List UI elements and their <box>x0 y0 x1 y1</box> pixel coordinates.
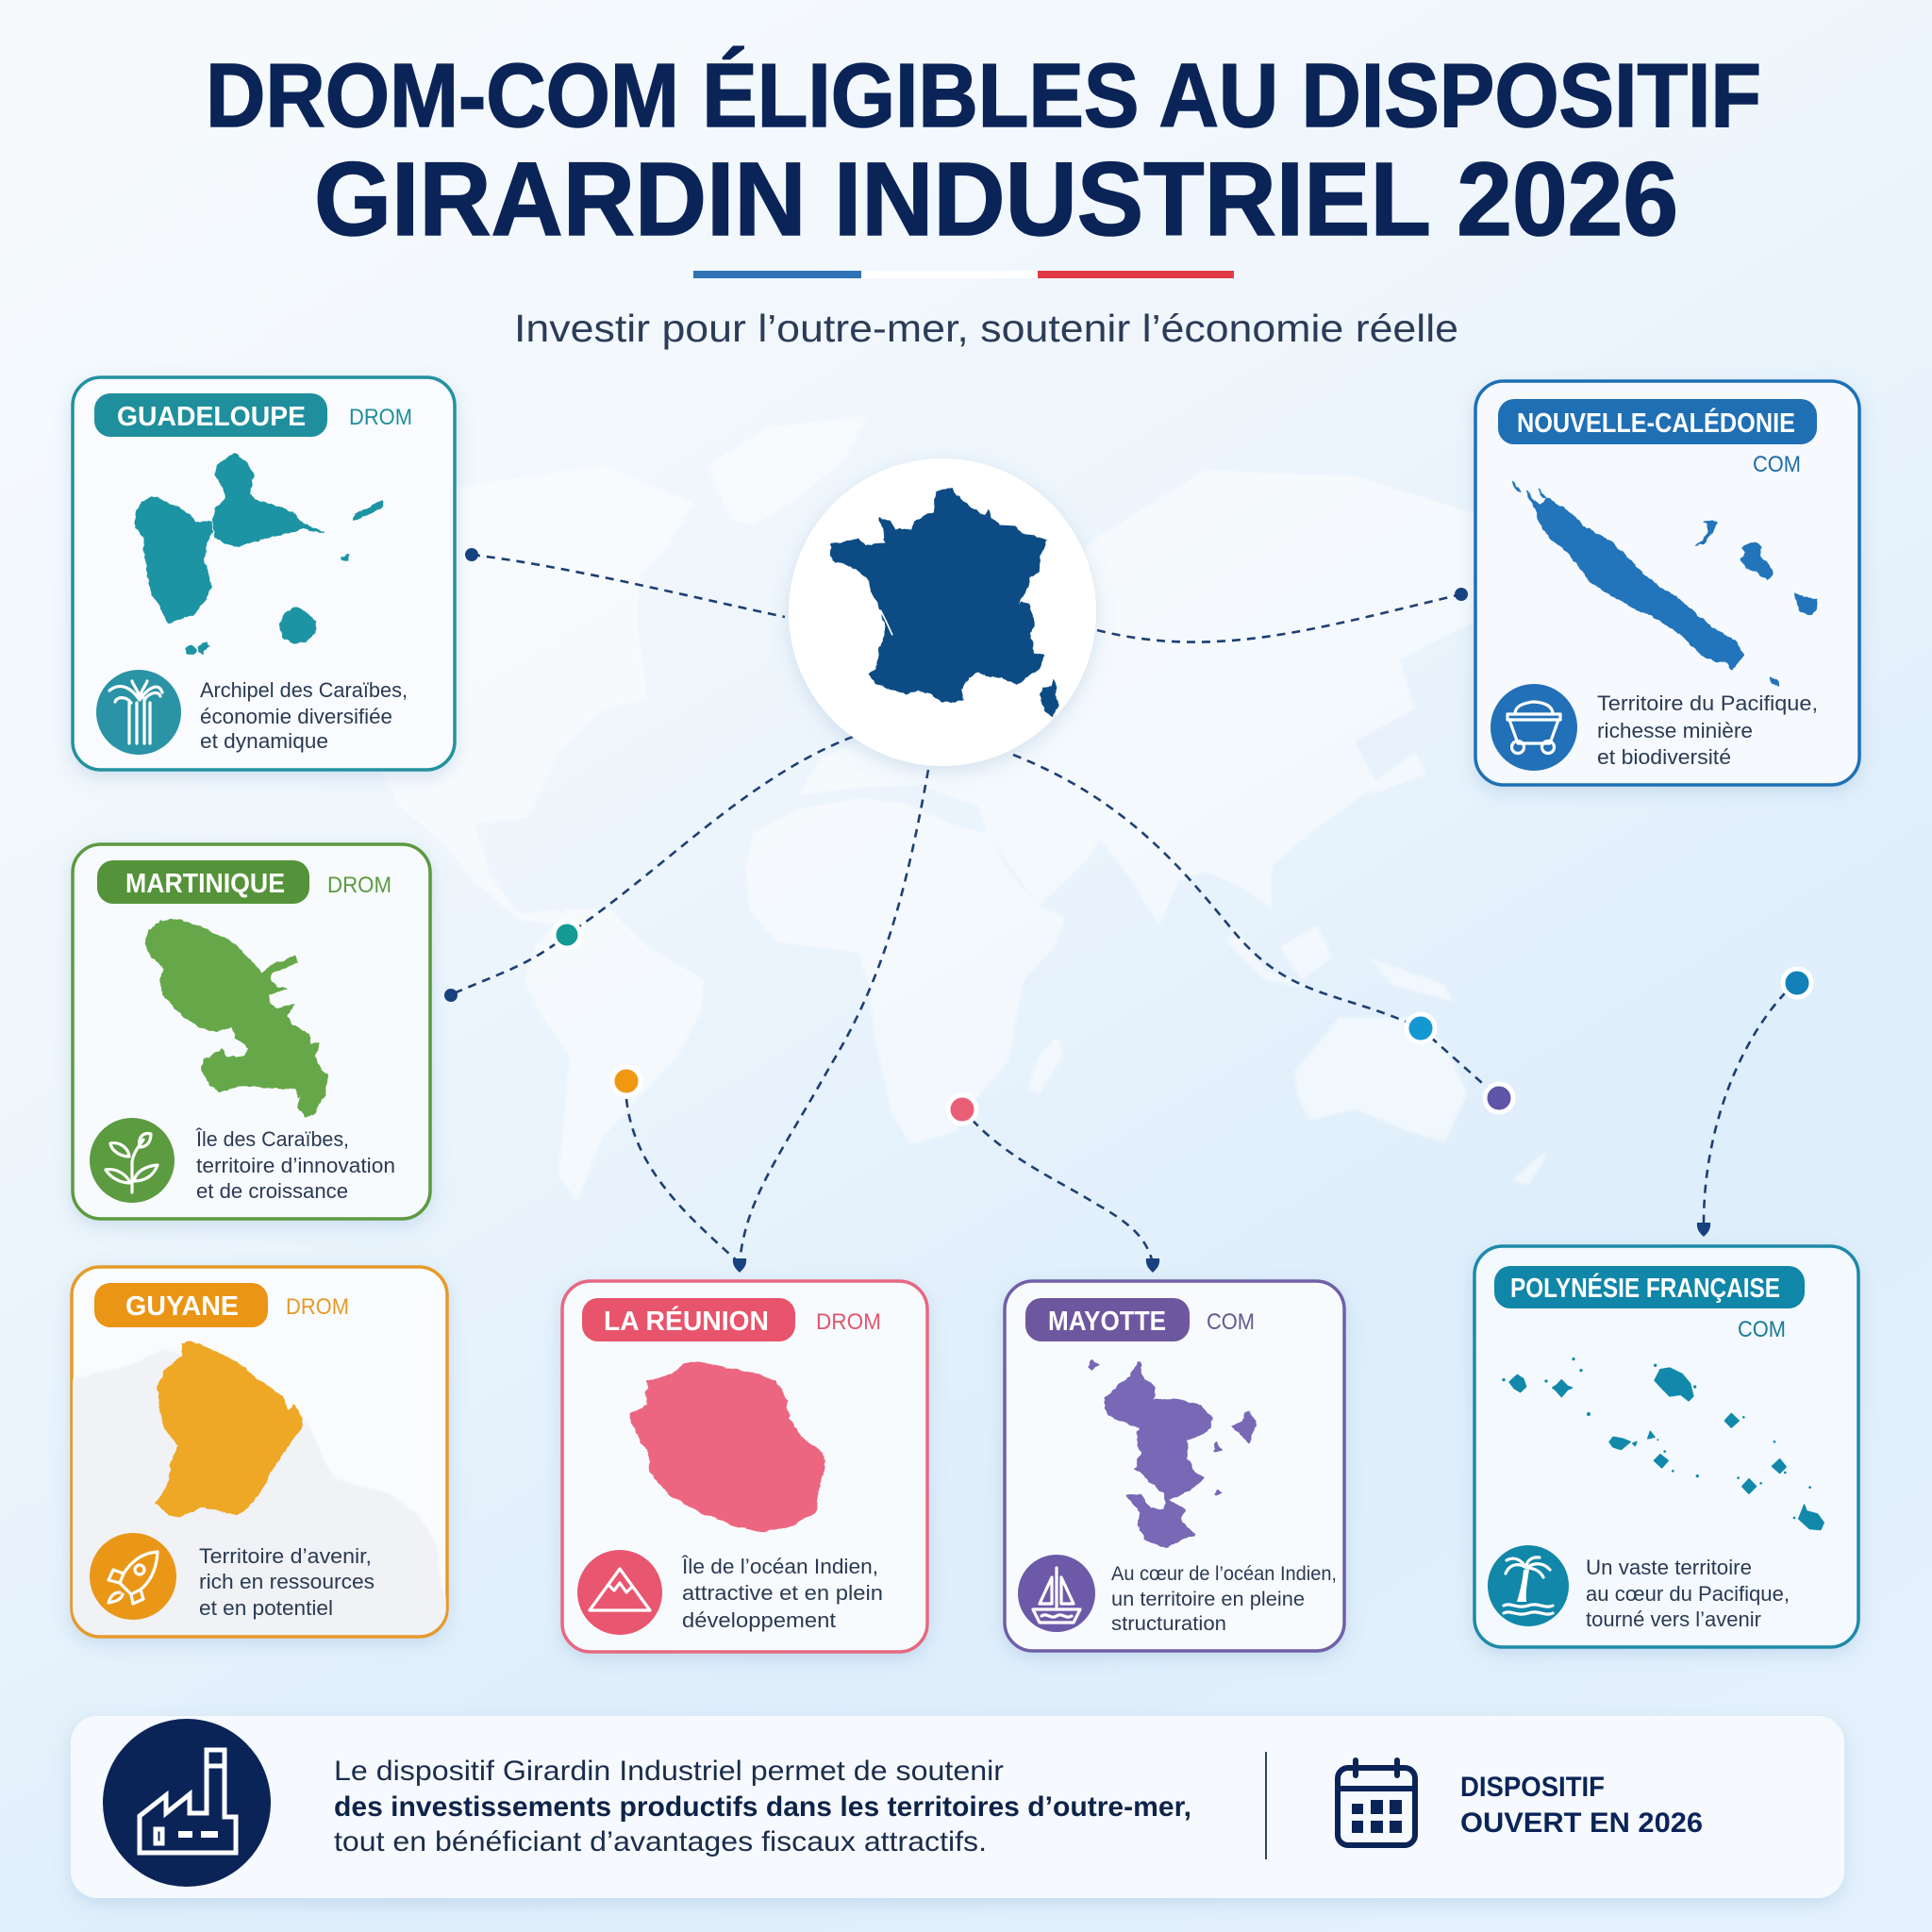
description: économie diversifiée <box>200 705 392 728</box>
opening note <box>1460 1772 1703 1839</box>
icon: factory <box>103 1719 271 1887</box>
map: Nouvelle-Calédonie <box>1512 482 1817 686</box>
panel: Guadeloupe <box>73 377 455 770</box>
description: structuration <box>1111 1613 1226 1635</box>
tricolour rule <box>693 271 1234 278</box>
label pill: Martinique: MARTINIQUE <box>125 869 285 899</box>
opening note: DISPOSITIF <box>1460 1772 1605 1803</box>
description: territoire d’innovation <box>196 1154 395 1177</box>
description: et dynamique <box>200 729 328 753</box>
title: GIRARDIN INDUSTRIEL 2026 <box>314 142 1678 258</box>
label pill: La Réunion: LA RÉUNION <box>604 1305 769 1337</box>
panel: Nouvelle-Calédonie <box>1475 381 1859 785</box>
description <box>1586 1556 1790 1631</box>
label pill: Nouvelle-Calédonie <box>1498 399 1817 444</box>
title <box>206 45 1761 258</box>
France centre circle <box>789 458 1096 766</box>
description <box>681 1555 883 1632</box>
map: Polynésie française <box>1502 1357 1824 1530</box>
connector end dots <box>444 548 1710 1273</box>
divider <box>1265 1752 1267 1859</box>
map: La Réunion <box>633 1362 824 1531</box>
map: Martinique <box>145 920 327 1116</box>
opening note: OUVERT EN 2026 <box>1460 1807 1703 1839</box>
icon: sailboat <box>1018 1555 1095 1632</box>
title: DROM-COM ÉLIGIBLES AU DISPOSITIF <box>206 45 1761 146</box>
icon: calendar <box>1338 1760 1415 1845</box>
banner text <box>334 1756 1191 1857</box>
panel: Polynésie française <box>1474 1246 1858 1647</box>
description: Un vaste territoire <box>1586 1556 1752 1579</box>
description: Archipel des Caraïbes, <box>200 678 408 702</box>
description: un territoire en pleine <box>1111 1589 1305 1610</box>
description <box>1111 1563 1337 1635</box>
description: et de croissance <box>196 1179 348 1203</box>
icon: plant <box>90 1118 175 1203</box>
label pill: La Réunion <box>582 1298 795 1341</box>
description: Territoire du Pacifique, <box>1597 691 1818 715</box>
map: Guyane <box>156 1341 303 1517</box>
status: DROM: DROM <box>286 1294 349 1320</box>
status: COM: COM <box>1207 1309 1255 1335</box>
panel: Guyane <box>69 1267 447 1637</box>
description: au cœur du Pacifique, <box>1586 1582 1790 1606</box>
description: richesse minière <box>1597 719 1753 742</box>
description <box>200 678 408 753</box>
map: Mayotte <box>1090 1361 1256 1547</box>
banner text: tout en bénéficiant d’avantages fiscaux attractifs. <box>334 1826 987 1857</box>
panel: La Réunion <box>562 1281 927 1652</box>
status: COM: COM <box>1738 1317 1786 1342</box>
map: Guadeloupe <box>136 454 382 654</box>
description <box>195 1127 395 1203</box>
panel: Martinique <box>73 844 430 1219</box>
status: DROM: DROM <box>816 1309 881 1335</box>
description: développement <box>682 1608 837 1632</box>
label pill: Mayotte: MAYOTTE <box>1048 1307 1166 1337</box>
map: metropolitan France <box>830 488 1058 716</box>
neighbouring land shading <box>69 1349 446 1637</box>
icon: sugar cane <box>96 670 181 755</box>
subtitle: Investir pour l’outre-mer, soutenir l’économie réelle <box>514 307 1458 350</box>
description: Territoire d’avenir, <box>199 1544 372 1568</box>
icon: mountain <box>577 1550 662 1635</box>
label pill: Mayotte <box>1025 1298 1190 1341</box>
label pill: Guadeloupe: GUADELOUPE <box>117 402 306 432</box>
icon: mine cart <box>1491 684 1577 771</box>
banner text: des investissements productifs dans les territoires d’outre-mer, <box>334 1791 1191 1823</box>
description: Île de l’océan Indien, <box>681 1555 878 1578</box>
status: COM: COM <box>1753 452 1801 477</box>
description: tourné vers l’avenir <box>1586 1607 1761 1631</box>
icon: rocket <box>90 1533 176 1620</box>
label pill: Nouvelle-Calédonie: NOUVELLE-CALÉDONIE <box>1517 407 1795 439</box>
description: rich en ressources <box>199 1570 375 1593</box>
description: Au cœur de l’océan Indien, <box>1111 1563 1337 1585</box>
world map background <box>272 416 1546 1202</box>
banner text: Le dispositif Girardin Industriel permet de soutenir <box>334 1756 1004 1787</box>
location markers <box>554 922 1811 1124</box>
description: Île des Caraïbes, <box>195 1127 349 1151</box>
label pill: Polynésie française <box>1494 1266 1805 1308</box>
description <box>199 1544 375 1620</box>
label pill: Guadeloupe <box>94 393 327 437</box>
label pill: Guyane: GUYANE <box>125 1291 239 1322</box>
label pill: Martinique <box>97 860 309 904</box>
panel: Mayotte <box>1005 1281 1344 1651</box>
label pill: Polynésie française: POLYNÉSIE FRANÇAISE <box>1510 1272 1780 1304</box>
description: attractive et en plein <box>682 1581 883 1605</box>
status: DROM: DROM <box>349 405 412 430</box>
status: DROM: DROM <box>327 873 391 898</box>
description: et en potentiel <box>199 1596 333 1620</box>
icon: palm tree <box>1488 1545 1569 1626</box>
description <box>1597 691 1818 769</box>
bottom banner <box>71 1716 1844 1898</box>
description: et biodiversité <box>1597 745 1731 769</box>
label pill: Guyane <box>94 1283 268 1327</box>
connector lines <box>450 555 1796 1263</box>
